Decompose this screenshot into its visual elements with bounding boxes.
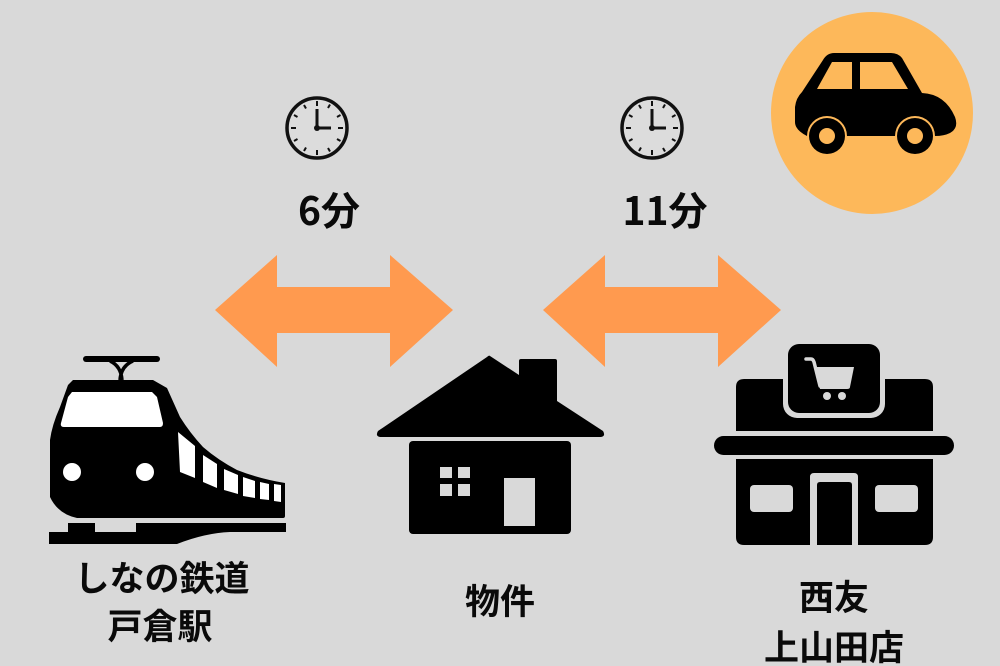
time label: 11 minutes: 11分 [622, 181, 708, 237]
icon: house [377, 356, 604, 534]
label: station: 戸倉駅 [107, 599, 213, 650]
arrow: station to property [215, 255, 453, 367]
icon: clock left [287, 98, 347, 158]
time label: 6 minutes: 6分 [298, 181, 360, 237]
label: store [764, 570, 904, 666]
label: station: しなの鉄道 [74, 551, 250, 602]
icon: car in circle [771, 12, 973, 214]
label: station [74, 551, 250, 650]
label: store: 西友 [799, 570, 869, 621]
arrow: property to store [543, 255, 781, 367]
icon: supermarket [714, 344, 954, 545]
label: property: 物件 [465, 574, 535, 625]
icon: train [49, 356, 286, 544]
icon: clock right [622, 98, 682, 158]
